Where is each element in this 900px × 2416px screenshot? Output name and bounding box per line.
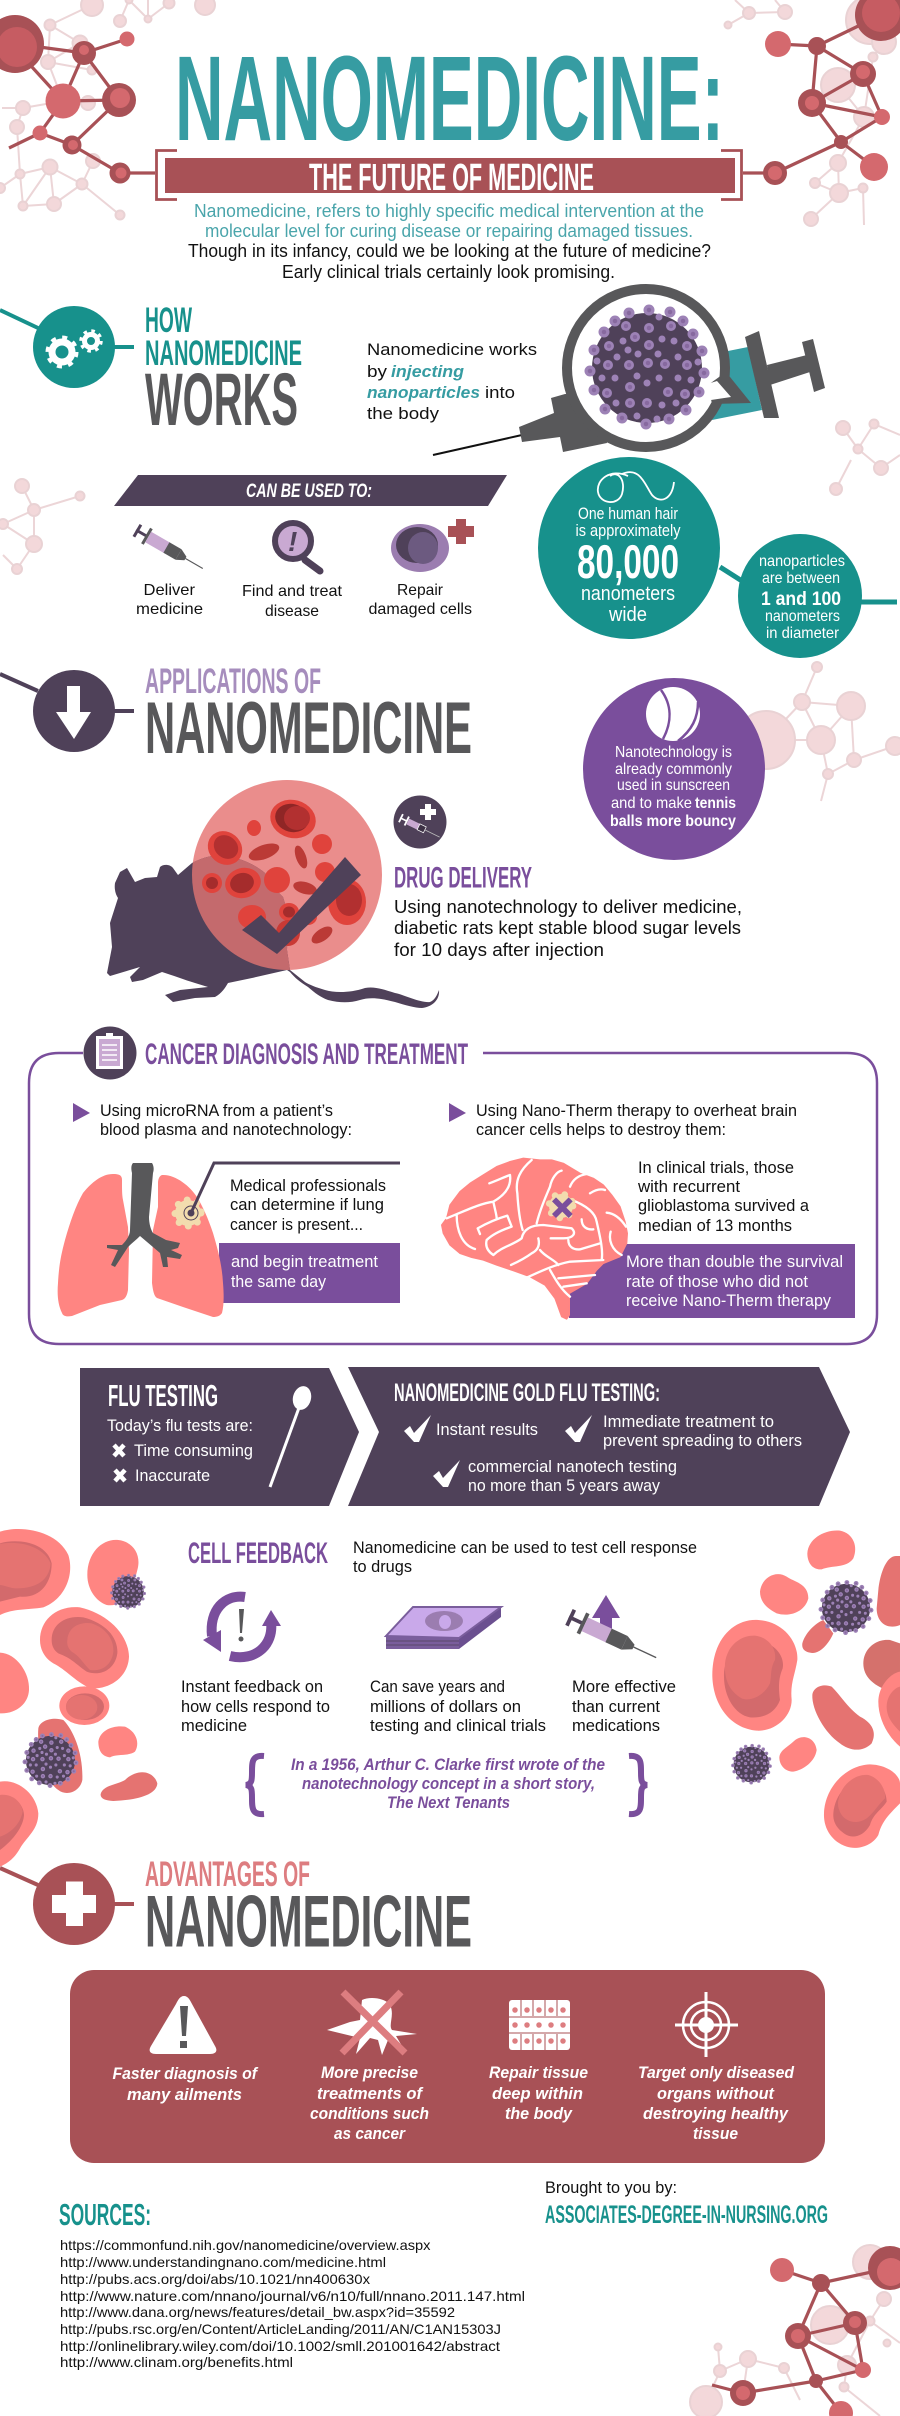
panel: flu testing <box>80 1368 359 1506</box>
text: instant feedback: Instant feedback on <box>181 1678 323 1696</box>
label: deliver medicine: medicine <box>136 601 203 618</box>
quote: arthur c clarke: The Next Tenants <box>387 1794 510 1812</box>
sources list <box>60 2237 525 2370</box>
panel: gold flu testing: Immediate treatment to <box>603 1413 774 1431</box>
panel: gold flu testing: no more than 5 years away <box>468 1477 661 1495</box>
heading: applications of nanomedicine: APPLICATIONS OF <box>145 662 321 701</box>
text: more effective <box>572 1678 676 1735</box>
panel: advantages <box>70 1970 825 2163</box>
molecule: middle right upper <box>830 420 900 495</box>
text: drug delivery: Using nanotechnology to deliver medicine, <box>394 897 742 917</box>
text: instant feedback: medicine <box>181 1717 247 1735</box>
callout: survival rate <box>569 1244 855 1318</box>
icon: feedback cycle <box>203 1597 281 1657</box>
sources list: http://www.dana.org/news/features/detail_bw.aspx?id=35592 <box>60 2304 455 2320</box>
credit: brought to you by: Brought to you by: <box>545 2178 677 2197</box>
text: repair tissue <box>489 2063 588 2123</box>
icon: clipboard <box>84 1026 136 1080</box>
heading: cell feedback: CELL FEEDBACK <box>188 1537 328 1570</box>
label: deliver medicine <box>136 582 203 618</box>
text: drug delivery: DRUG DELIVERY <box>394 862 532 894</box>
label: find and treat disease: Find and treat <box>242 583 343 600</box>
callout: nanoparticle size circle: are between <box>762 570 840 587</box>
heading: advantages of nanomedicine <box>145 1855 472 1962</box>
quote: arthur c clarke: In a 1956, Arthur C. Clarke first wrote of the <box>291 1756 605 1774</box>
text: repair tissue: deep within <box>492 2084 583 2103</box>
text: how it works: nanoparticles <box>367 383 480 402</box>
heading: how nanomedicine works: NANOMEDICINE <box>145 334 302 373</box>
illustration: brain <box>442 1158 627 1319</box>
icon: down arrow <box>0 670 134 752</box>
text: save years: millions of dollars on <box>370 1698 521 1716</box>
icon: damaged cell and cross <box>391 519 474 572</box>
callout: nanoparticle size circle <box>738 534 897 658</box>
heading: how nanomedicine works: HOW <box>145 301 192 340</box>
callout: tennis balls circle: used in sunscreen <box>617 777 730 794</box>
panel: flu testing: Today’s flu tests are: <box>107 1417 253 1435</box>
text: how it works: injecting <box>391 362 465 381</box>
sources list: http://www.clinam.org/benefits.html <box>60 2354 293 2370</box>
text: repair tissue: Repair tissue <box>489 2063 588 2082</box>
text: how it works: into <box>485 383 515 402</box>
text: target organs: organs without <box>657 2084 775 2103</box>
panel: gold flu testing: commercial nanotech testing <box>468 1458 677 1476</box>
heading: how nanomedicine works: WORKS <box>145 358 298 441</box>
text: more effective: More effective <box>572 1678 676 1696</box>
text: clinical trials: In clinical trials, those <box>638 1159 794 1177</box>
decoration: left blood cells <box>0 1529 157 1867</box>
callout line <box>191 1163 400 1213</box>
panel: cancer diagnosis and treatment <box>29 1026 877 1344</box>
icon: crossed-out roots <box>327 1992 417 2055</box>
text: more effective: than current <box>572 1698 660 1716</box>
callout: tennis balls circle <box>583 678 765 860</box>
text: how it works: by <box>367 362 388 381</box>
panel: gold flu testing: prevent spreading to others <box>603 1432 802 1450</box>
panel: flu testing: FLU TESTING <box>108 1378 218 1413</box>
text: repair tissue: the body <box>505 2104 573 2123</box>
panel: gold flu testing <box>348 1367 850 1506</box>
text: cell response <box>353 1539 697 1576</box>
text: target organs <box>638 2063 795 2143</box>
icon: magnifier: ! <box>288 526 297 557</box>
sources list: http://pubs.rsc.org/en/Content/ArticleLanding/2011/AN/C1AN15303J <box>60 2321 501 2337</box>
icon: medical cross <box>0 1863 134 1945</box>
text: target organs: Target only diseased <box>638 2063 795 2082</box>
text: target organs: destroying healthy <box>643 2104 789 2123</box>
callout: nanoparticle size circle: in diameter <box>766 625 840 642</box>
credit: brought to you by <box>545 2178 828 2229</box>
molecule: top left background <box>0 0 215 220</box>
callout: tennis balls circle: tennis <box>695 795 736 812</box>
icon: drug delivery <box>394 796 446 848</box>
heading: cancer diagnosis: CANCER DIAGNOSIS AND TREATMENT <box>145 1038 468 1071</box>
banner: the future of medicine <box>156 150 742 200</box>
label: repair damaged cells: Repair <box>397 582 444 599</box>
text: how it works <box>367 340 537 423</box>
molecule: top right background <box>724 0 896 226</box>
text: more precise: More precise <box>321 2063 418 2082</box>
banner: can be used to <box>114 475 507 506</box>
callout: nanoparticle size circle: 1 and 100 <box>761 589 841 610</box>
heading: advantages of nanomedicine: NANOMEDICINE <box>145 1882 472 1962</box>
heading: applications of nanomedicine: NANOMEDICINE <box>145 688 472 769</box>
text: microRNA <box>73 1102 352 1139</box>
banner: the future of medicine: THE FUTURE OF MEDICINE <box>309 157 594 199</box>
illustration: syringe with magnified nanoparticle <box>433 289 825 455</box>
text: faster diagnosis <box>112 2064 259 2104</box>
text: nano-therm <box>449 1102 797 1139</box>
callout: survival rate: rate of those who did not <box>626 1273 808 1291</box>
callout: tennis balls circle: Nanotechnology is <box>615 744 732 761</box>
sources list: http://www.understandingnano.com/medicine.html <box>60 2254 386 2270</box>
text: cell response: Nanomedicine can be used to test cell response <box>353 1539 697 1557</box>
callout: tennis balls circle: and to make <box>611 795 692 812</box>
quote: arthur c clarke <box>246 1756 647 1814</box>
text: save years: testing and clinical trials <box>370 1717 546 1735</box>
icon: arrow and syringe <box>564 1595 661 1668</box>
text: nano-therm: cancer cells helps to destroy them: <box>476 1121 726 1139</box>
text: faster diagnosis: many ailments <box>127 2085 242 2104</box>
text: more precise: treatments of <box>317 2084 424 2103</box>
text: how it works: Nanomedicine works <box>367 340 537 359</box>
text: drug delivery: diabetic rats kept stable blood sugar levels <box>394 918 741 938</box>
intro paragraph: molecular level for curing disease or repairing damaged tissues. <box>205 221 693 241</box>
text: nano-therm: Using Nano-Therm therapy to overheat brain <box>476 1102 797 1120</box>
text: instant feedback <box>181 1678 330 1735</box>
heading: applications of nanomedicine <box>145 662 472 769</box>
intro paragraph: Early clinical trials certainly look promising. <box>282 262 615 282</box>
text: more precise: as cancer <box>334 2124 406 2143</box>
panel: gold flu testing: NANOMEDICINE GOLD FLU TESTING: <box>394 1379 660 1407</box>
callout: survival rate: receive Nano-Therm therapy <box>626 1292 832 1310</box>
illustration: lungs <box>58 1163 224 1317</box>
icon: swab <box>270 1384 314 1487</box>
text: medical professionals <box>230 1177 386 1234</box>
text: clinical trials: with recurrent <box>637 1178 740 1196</box>
text: faster diagnosis: Faster diagnosis of <box>112 2064 259 2083</box>
heading: how nanomedicine works <box>145 301 302 441</box>
callout: tennis balls circle: already commonly <box>615 761 732 778</box>
text: save years <box>370 1678 546 1735</box>
panel: flu testing: Time consuming <box>134 1442 253 1460</box>
sources list: http://www.nature.com/nnano/journal/v6/n10/full/nnano.2011.147.html <box>60 2288 525 2304</box>
text: cell response: to drugs <box>353 1558 412 1576</box>
text: how it works: the body <box>367 404 440 423</box>
quote: arthur c clarke: nanotechnology concept in a short story, <box>302 1775 595 1793</box>
panel: gold flu testing: Instant results <box>436 1421 538 1439</box>
text: medical professionals: Medical professionals <box>230 1177 386 1195</box>
molecule: top left foreground <box>0 15 155 184</box>
text: more precise <box>310 2063 429 2143</box>
callout: begin treatment: the same day <box>231 1273 327 1291</box>
illustration: diabetic rat with blood cells <box>107 780 439 1008</box>
label: find and treat disease: disease <box>265 603 319 620</box>
icon: cross marks <box>114 1445 125 1481</box>
intro paragraph: Nanomedicine, refers to highly specific medical intervention at the <box>194 201 704 221</box>
text: clinical trials <box>637 1159 810 1235</box>
banner: can be used to: CAN BE USED TO: <box>246 481 372 502</box>
molecule: middle left <box>0 479 84 574</box>
label: repair damaged cells: damaged cells <box>368 601 472 618</box>
callout: human hair circle: One human hair <box>578 504 678 523</box>
callout: nanoparticle size circle: nanoparticles <box>759 553 845 570</box>
text: more precise: conditions such <box>310 2104 429 2123</box>
icon: gears <box>0 306 134 388</box>
panel: flu testing: Inaccurate <box>135 1467 210 1485</box>
callout: survival rate: More than double the survival <box>626 1253 843 1271</box>
sources list: http://pubs.acs.org/doi/abs/10.1021/nn400630x <box>60 2271 370 2287</box>
text: microRNA: blood plasma and nanotechnology: <box>100 1121 352 1139</box>
callout: begin treatment <box>219 1243 400 1303</box>
icon: warning triangle <box>150 1996 216 2054</box>
callout: human hair circle: 80,000 <box>577 535 679 588</box>
callout: human hair circle: wide <box>608 604 647 626</box>
icon: magnifier <box>275 523 320 571</box>
icon: money stack <box>386 1607 501 1649</box>
callout: nanoparticle size circle: nanometers <box>765 608 840 625</box>
callout: human hair circle: nanometers <box>581 583 675 605</box>
molecule: bottom right background <box>690 2245 900 2416</box>
callout: human hair circle <box>538 457 742 639</box>
label: repair damaged cells <box>368 582 472 618</box>
text: microRNA: Using microRNA from a patient’s <box>100 1102 333 1120</box>
callout: tennis balls circle: balls more bouncy <box>610 813 736 830</box>
heading: advantages of nanomedicine: ADVANTAGES OF <box>145 1855 310 1894</box>
sources list: http://onlinelibrary.wiley.com/doi/10.1002/smll.201001642/abstract <box>60 2338 500 2354</box>
icon: check marks <box>404 1415 592 1487</box>
text: clinical trials: glioblastoma survived a <box>638 1197 810 1215</box>
decoration: right blood cells <box>712 1531 900 1848</box>
text: instant feedback: how cells respond to <box>181 1698 330 1716</box>
sources list: https://commonfund.nih.gov/nanomedicine/overview.aspx <box>60 2237 430 2253</box>
callout: human hair circle: is approximately <box>576 521 681 540</box>
icon: tissue cells <box>509 2000 570 2050</box>
icon: target <box>675 1992 738 2057</box>
text: medical professionals: can determine if lung <box>230 1196 384 1214</box>
intro paragraph: Though in its infancy, could we be looking at the future of medicine? <box>188 241 711 261</box>
text: drug delivery: for 10 days after injection <box>394 940 604 960</box>
text: save years: Can save years and <box>370 1678 505 1696</box>
label: find and treat disease <box>242 583 343 620</box>
label: deliver medicine: Deliver <box>144 582 196 599</box>
text: drug delivery <box>394 862 742 960</box>
text: more effective: medications <box>572 1717 660 1735</box>
icon: syringe deliver medicine <box>132 522 207 576</box>
molecule: right of applications <box>737 662 900 801</box>
molecule: bottom right foreground <box>712 2246 900 2416</box>
text: target organs: tissue <box>693 2124 738 2143</box>
callout: begin treatment: and begin treatment <box>231 1253 378 1271</box>
intro paragraph <box>188 201 711 282</box>
molecule: top right foreground <box>743 0 900 185</box>
text: medical professionals: cancer is present... <box>230 1216 363 1234</box>
text: clinical trials: median of 13 months <box>638 1217 792 1235</box>
heading: sources: SOURCES: <box>59 2197 151 2232</box>
